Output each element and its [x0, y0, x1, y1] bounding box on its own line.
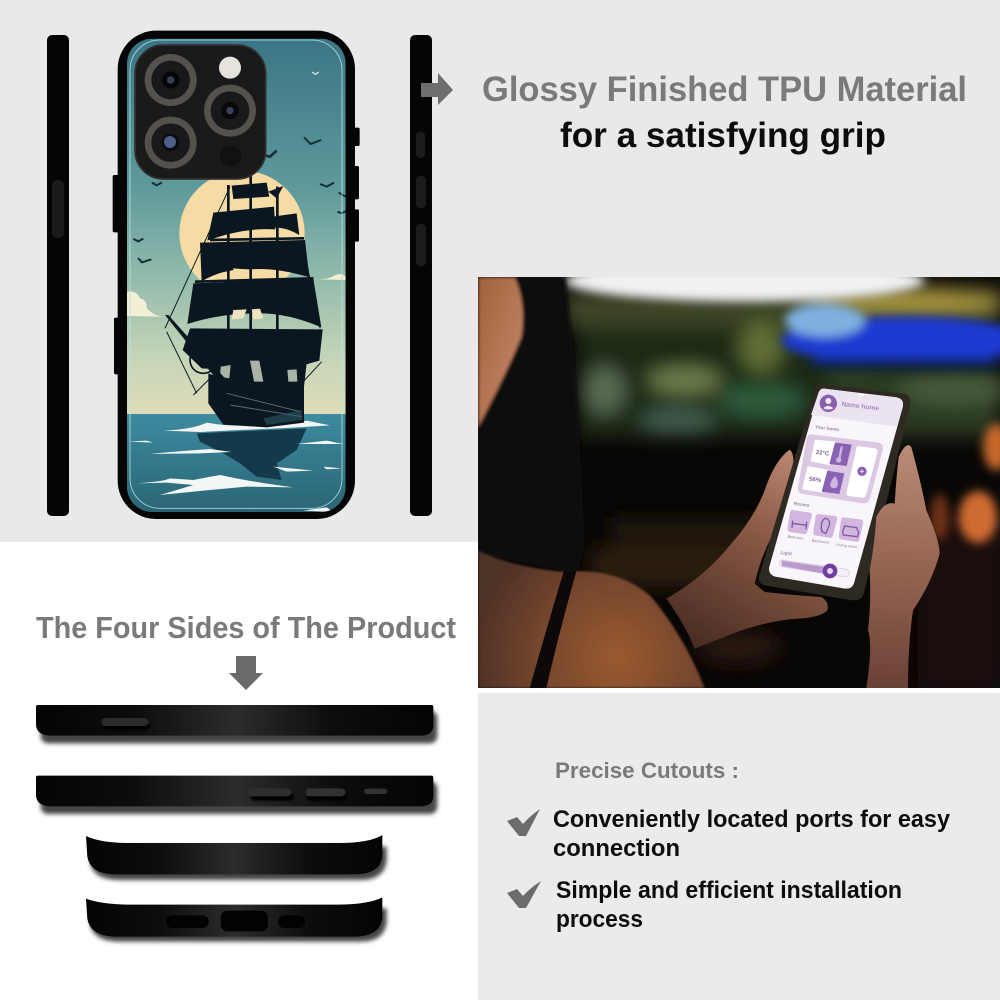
- left side view of phone case: [47, 35, 69, 516]
- bullet text 1: [553, 806, 951, 862]
- arrow pointing down: [229, 656, 263, 690]
- bullet text 1: Conveniently located ports for easy: [553, 806, 951, 833]
- shoulder: [478, 550, 705, 688]
- heading: glossy finish: for a satisfying grip: [560, 116, 886, 155]
- bullet text 2: [556, 877, 902, 933]
- case side strip 1: [36, 705, 437, 743]
- sea: [127, 414, 346, 512]
- room captions: Bedroom: [787, 535, 804, 541]
- right side view of phone case: [410, 35, 432, 516]
- case side strip 3: [86, 835, 387, 880]
- right hand: [866, 445, 940, 688]
- clouds: [127, 274, 346, 317]
- temperature tile: [812, 441, 852, 466]
- sensor: [220, 145, 241, 167]
- light label: Light: [780, 550, 793, 556]
- moon: [179, 172, 305, 283]
- check icon 2: [507, 881, 541, 908]
- ship reflection: [197, 428, 307, 480]
- lens right: [204, 85, 256, 137]
- room captions: Bathroom: [812, 539, 830, 545]
- light slider: [779, 560, 849, 578]
- waves: [128, 421, 343, 512]
- arrow pointing right: [421, 73, 453, 105]
- side buttons: [113, 128, 360, 374]
- humidity tile: [803, 467, 844, 494]
- your home label: Your home: [815, 424, 840, 432]
- room tiles: [787, 510, 863, 542]
- app title: Name home: [841, 401, 880, 413]
- bullet text 1: connection: [553, 835, 680, 862]
- lifestyle photo: hands holding phone: [478, 260, 1000, 688]
- case side strip 2: [36, 776, 437, 814]
- case side strip 4: [86, 897, 387, 942]
- lens bottom left: [145, 117, 197, 169]
- left hand: [666, 450, 828, 649]
- rim highlight line: [130, 40, 342, 508]
- temperature tile: 22°C: [815, 450, 830, 458]
- flash: [219, 57, 241, 79]
- phone screen: [769, 389, 903, 589]
- heading: precise cutouts: Precise Cutouts :: [555, 758, 739, 783]
- room captions: [787, 535, 858, 549]
- blurred background scenery: [565, 288, 1000, 688]
- climate card: [798, 434, 883, 503]
- lower rigging detail: [215, 363, 307, 387]
- camera module: [135, 45, 266, 179]
- phone case back view: [113, 31, 360, 519]
- case body: [118, 31, 355, 519]
- ship: [165, 173, 323, 427]
- heading: glossy finish: [482, 70, 967, 155]
- phone body: [759, 384, 910, 600]
- lens top left: [145, 54, 197, 106]
- head and hair: [478, 277, 580, 438]
- room captions: Living room: [836, 543, 858, 549]
- humidity tile: 56%: [809, 477, 822, 484]
- add tile: [846, 446, 878, 498]
- heading: glossy finish: Glossy Finished TPU Material: [482, 70, 967, 109]
- check icon 1: [507, 809, 540, 836]
- birds: [133, 72, 346, 262]
- bullet text 2: Simple and efficient installation: [556, 877, 902, 904]
- bullet text 2: process: [556, 906, 643, 933]
- app header: [811, 389, 903, 427]
- phone and app: [759, 384, 910, 600]
- printed artwork: [127, 39, 346, 512]
- dress strap: [530, 570, 577, 688]
- heading: four sides: The Four Sides of The Product: [36, 610, 456, 645]
- rooms label: Rooms: [794, 501, 810, 508]
- avatar: [820, 395, 837, 412]
